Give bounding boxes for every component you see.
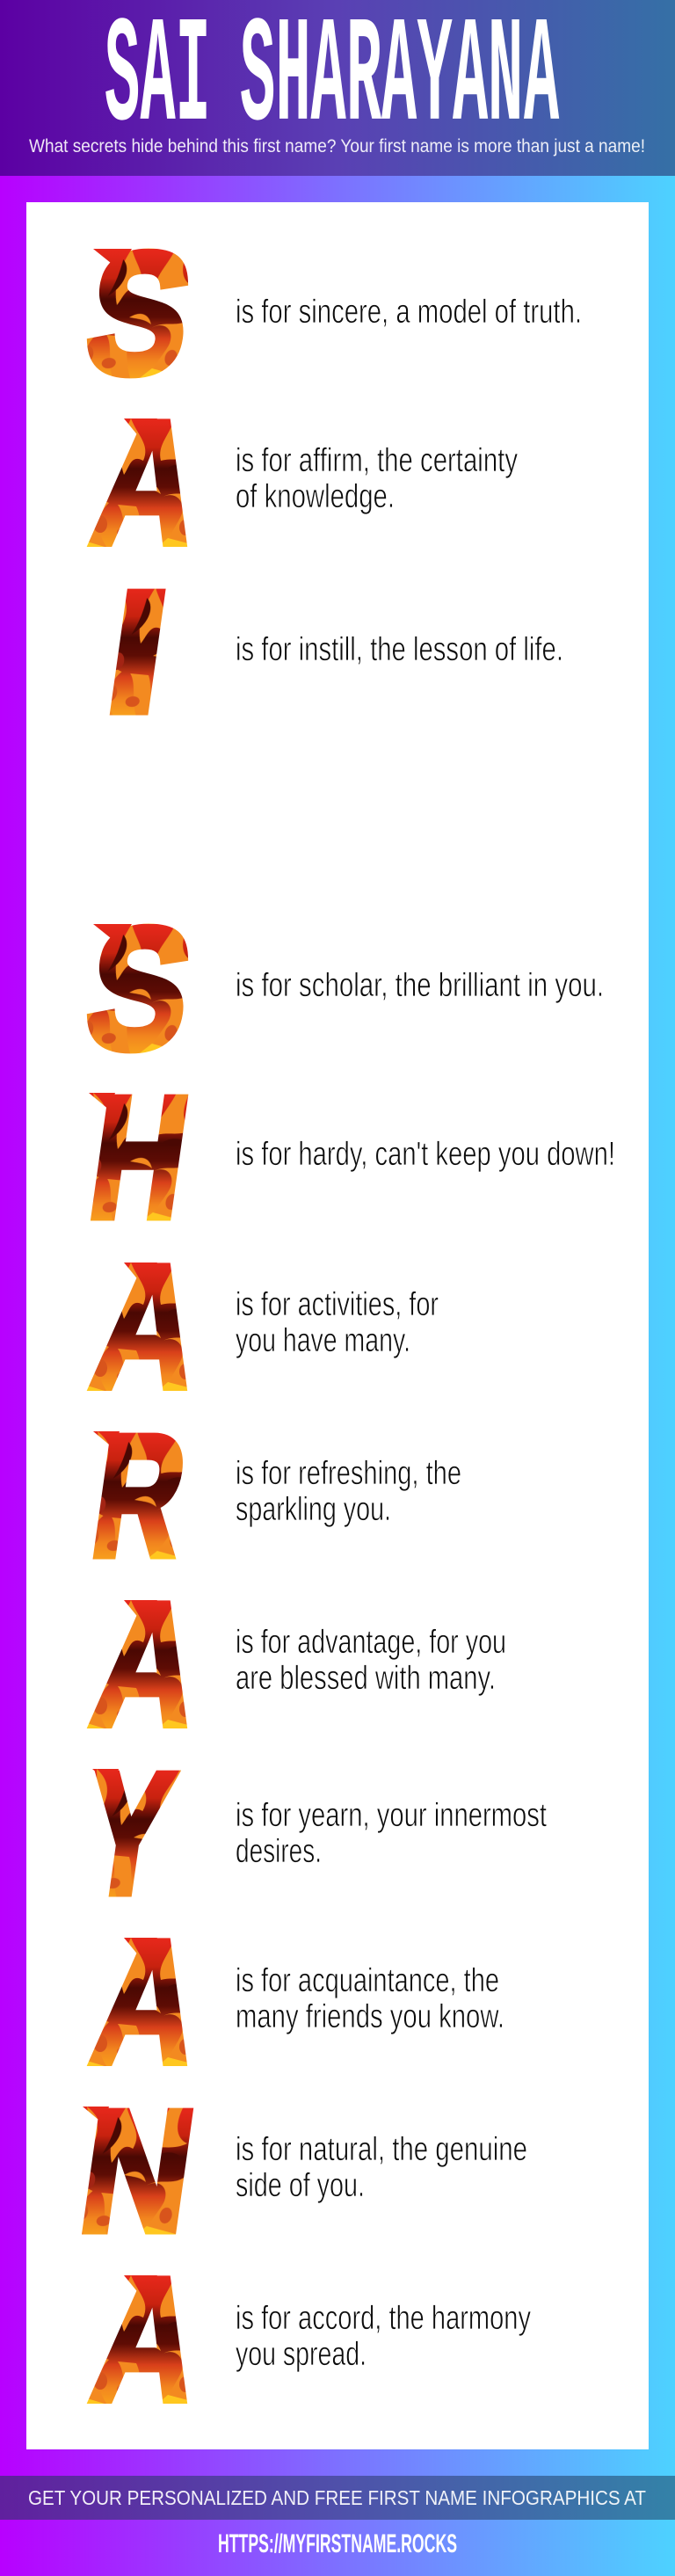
text: advantage: are blessed with many. <box>236 1660 496 1697</box>
text: activities: is for activities, for <box>236 1286 439 1323</box>
text: yearn: desires. <box>236 1833 322 1870</box>
row: A affirm <box>90 383 518 583</box>
text: yearn <box>236 1797 547 1870</box>
text: advantage: is for advantage, for you <box>236 1624 506 1661</box>
row: A acquaintance <box>90 1903 504 2102</box>
letter H: H <box>80 1061 199 1254</box>
row: R refreshing <box>83 1400 461 1592</box>
text: sincere: is for sincere, a model of truth. <box>236 294 582 331</box>
text: affirm: of knowledge. <box>236 478 395 515</box>
text: affirm: is for affirm, the certainty <box>236 442 518 479</box>
header band <box>0 0 675 176</box>
text: activities: you have many. <box>236 1322 410 1359</box>
row: A activities <box>90 1227 439 1427</box>
text: acquaintance <box>236 1962 504 2035</box>
text: instill: is for instill, the lesson of life. <box>236 631 563 668</box>
row: H hardy <box>80 1061 615 1254</box>
row: S scholar <box>76 892 604 1085</box>
letter A: A <box>90 1903 195 2102</box>
text: acquaintance: is for acquaintance, the <box>236 1962 499 1999</box>
letter A: A <box>90 2240 195 2440</box>
text: yearn: is for yearn, your innermost <box>236 1797 547 1834</box>
text: natural: is for natural, the genuine <box>236 2131 527 2168</box>
text: natural <box>236 2131 527 2204</box>
text: accord <box>236 2300 531 2373</box>
text: advantage <box>236 1624 506 1697</box>
text: accord: is for accord, the harmony <box>236 2300 531 2337</box>
letter A: A <box>90 383 195 583</box>
row: A accord <box>90 2240 531 2440</box>
row: Y yearn <box>75 1737 547 1930</box>
text: accord: you spread. <box>236 2336 367 2373</box>
footer band <box>0 2476 675 2520</box>
footer url: HTTPS://MYFIRSTNAME.ROCKS <box>218 2529 457 2558</box>
row: S sincere <box>76 217 582 410</box>
text: refreshing: is for refreshing, the <box>236 1455 461 1492</box>
letter A: A <box>90 1565 195 1765</box>
row: N natural <box>70 2075 527 2267</box>
row: I instill <box>96 556 563 748</box>
letter A: A <box>90 1227 195 1427</box>
text: refreshing <box>236 1455 461 1528</box>
text: natural: side of you. <box>236 2167 365 2204</box>
letter S: S <box>76 892 202 1085</box>
text: activities <box>236 1286 439 1359</box>
letter R: R <box>83 1400 196 1592</box>
letter N: N <box>70 2075 205 2267</box>
letter Y: Y <box>75 1737 183 1930</box>
text: acquaintance: many friends you know. <box>236 1998 504 2035</box>
row: A advantage <box>90 1565 506 1765</box>
letter I: I <box>96 556 179 748</box>
text: affirm <box>236 442 518 515</box>
letter S: S <box>76 217 202 410</box>
text: refreshing: sparkling you. <box>236 1491 391 1528</box>
